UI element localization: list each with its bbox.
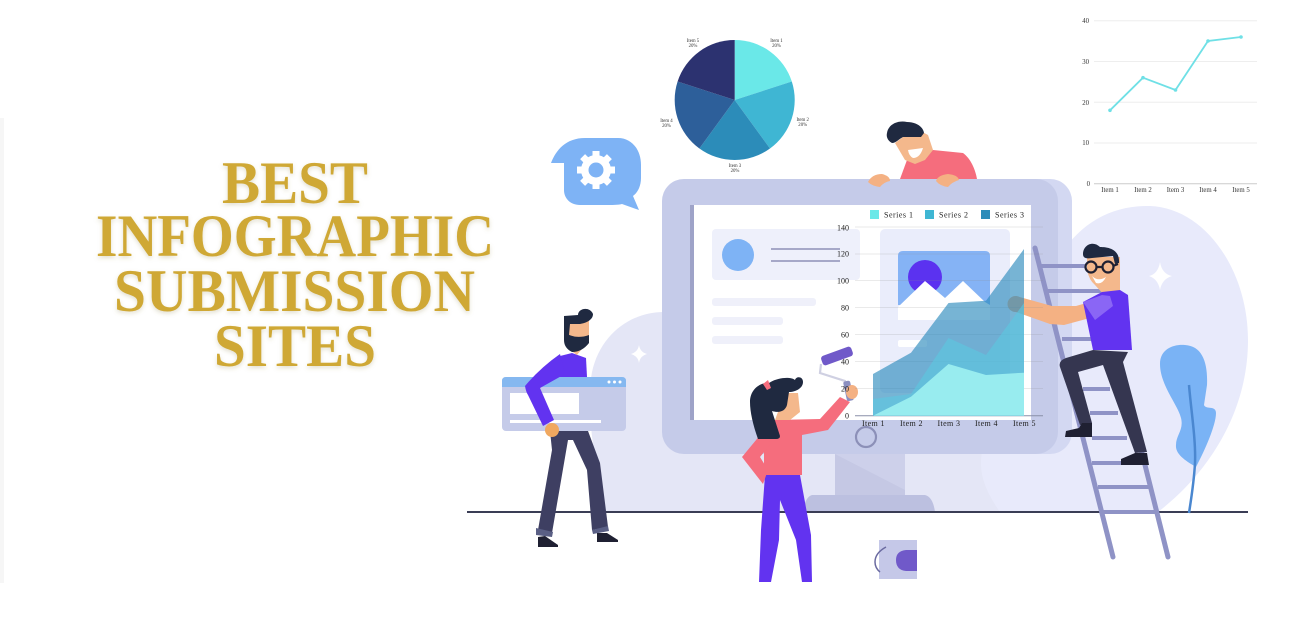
line chart: 20 [1082, 100, 1090, 107]
icon: gear [577, 151, 615, 189]
x axis labels [862, 419, 1036, 428]
title: INFOGRAPHIC [96, 202, 494, 270]
x axis labels: Item 2 [900, 419, 922, 428]
hands on monitor [868, 174, 959, 187]
y axis labels: 80 [841, 304, 849, 312]
line chart: 40 [1082, 18, 1090, 25]
title: SUBMISSION [114, 257, 475, 325]
man on ladder [1008, 244, 1149, 465]
arm [1008, 296, 1090, 325]
ground line [467, 511, 1248, 513]
pie chart: Item 3 [729, 164, 742, 169]
title: SITES [214, 312, 376, 380]
y axis labels: 100 [837, 276, 849, 286]
face [775, 393, 800, 420]
legend: Series 1 [884, 210, 913, 220]
line chart [1082, 18, 1257, 194]
pie chart: Item 2 [797, 118, 809, 123]
face [566, 320, 589, 355]
trousers [1060, 350, 1147, 453]
legend: Series 2 [939, 210, 968, 220]
x axis labels: Item 1 [862, 419, 884, 428]
line chart: Item 5 [1232, 187, 1250, 194]
torso [555, 353, 587, 377]
sparkles [631, 262, 1172, 363]
hair [750, 377, 803, 439]
woman with paint roller [742, 346, 858, 582]
y axis labels: 140 [837, 224, 849, 232]
pie chart: 20% [772, 44, 781, 49]
x axis labels: Item 3 [938, 419, 960, 428]
shoes [1065, 423, 1092, 437]
hand [846, 385, 858, 399]
x axis labels: Item 5 [1013, 419, 1036, 428]
area chart [837, 210, 1043, 428]
bent arm [742, 428, 770, 484]
y axis labels: 40 [841, 358, 849, 366]
series 3 area [873, 249, 1024, 416]
cuffs [536, 526, 609, 537]
stand [803, 454, 935, 512]
shirt [1083, 290, 1132, 350]
y axis labels: 0 [845, 412, 849, 420]
pie chart: 20% [731, 169, 739, 174]
man carrying window [502, 309, 626, 547]
pie chart: 20% [689, 44, 697, 49]
mug [875, 540, 917, 579]
series 1 area [873, 364, 1024, 416]
pie chart [660, 39, 809, 174]
glasses [1086, 262, 1118, 272]
line chart: Item 1 [1101, 187, 1119, 194]
arm [525, 354, 565, 426]
legend: Series 3 [995, 210, 1024, 220]
pie chart: Item 1 [770, 39, 783, 44]
panel: image card [880, 229, 1010, 393]
x axis labels: Item 4 [975, 419, 998, 428]
pie chart: Item 5 [687, 39, 700, 44]
plant [1160, 345, 1216, 513]
y axis labels: 20 [841, 384, 849, 394]
line chart: Item 2 [1134, 187, 1152, 194]
ladder [1035, 248, 1168, 557]
window [502, 377, 626, 431]
pie chart: 20% [798, 123, 807, 128]
gridlines [855, 227, 1043, 388]
pie chart: 20% [662, 124, 671, 129]
line chart: 30 [1082, 59, 1090, 66]
title: BEST [222, 149, 368, 217]
monitor [662, 174, 1072, 512]
shoes [538, 536, 558, 547]
button [856, 427, 876, 447]
line chart: Item 3 [1167, 187, 1185, 194]
legend [870, 210, 1024, 220]
hand [545, 423, 559, 437]
person behind monitor [887, 122, 977, 179]
shirt [764, 397, 850, 475]
screen [694, 205, 1031, 420]
line chart: 10 [1082, 140, 1090, 147]
background blobs [590, 206, 1248, 512]
speech bubble with gear icon [551, 138, 641, 210]
series 2 area [873, 303, 1024, 416]
trousers [538, 431, 608, 533]
y axis labels: 120 [837, 250, 849, 258]
line chart: 0 [1087, 181, 1091, 188]
text placeholder bars [712, 298, 816, 344]
title [96, 149, 494, 380]
panel: profile card [712, 229, 860, 280]
y axis labels [837, 224, 849, 420]
pie chart: Item 4 [660, 119, 673, 124]
roller [820, 346, 854, 401]
line chart: Item 4 [1199, 187, 1217, 194]
y axis labels: 60 [841, 330, 849, 340]
trousers [759, 475, 812, 582]
